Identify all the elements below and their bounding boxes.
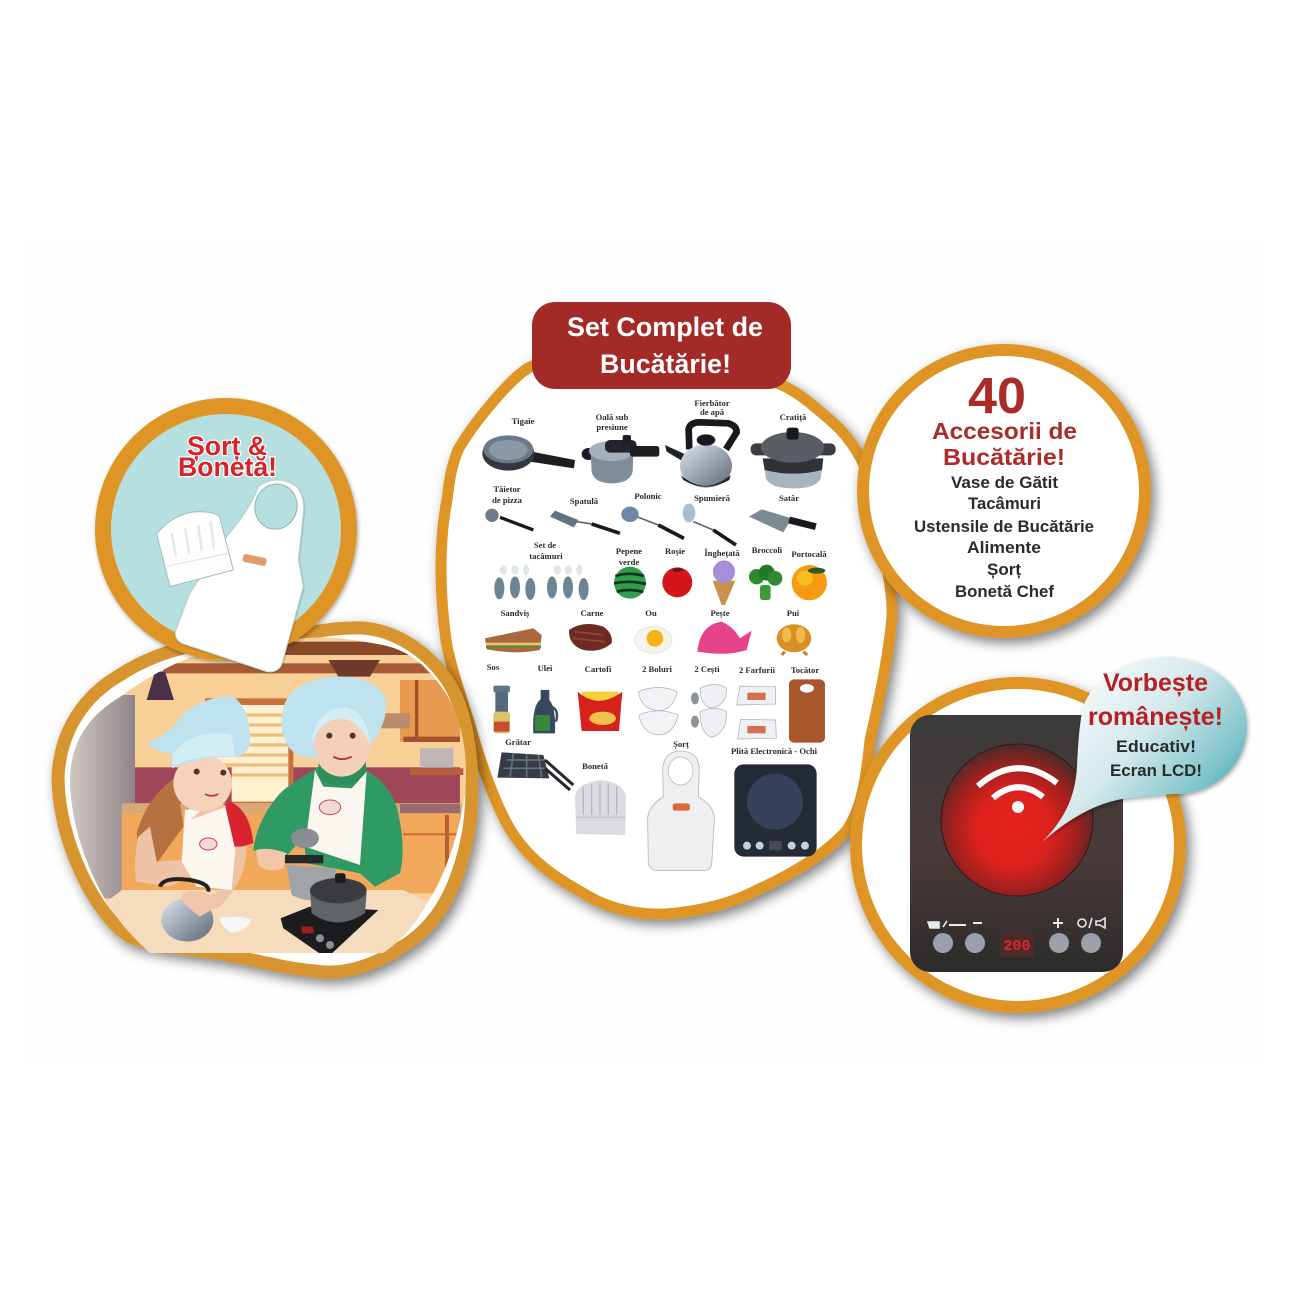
item: Broccoli: Broccoli	[752, 545, 783, 555]
wifi icon	[978, 768, 1057, 813]
LCD display: 200	[1003, 938, 1031, 955]
item: Oală sub presiune: Oală sub	[596, 412, 629, 422]
item: 2 Boluri: 2 Boluri	[642, 664, 673, 674]
item: Satâr	[749, 493, 817, 532]
panel: 40 accessories circle	[863, 350, 1145, 632]
apron illustration	[175, 479, 304, 672]
control buttons	[933, 933, 1101, 953]
item: Grătar	[497, 737, 573, 790]
item: Grătar: Grătar	[505, 737, 531, 747]
item: Bonetă	[575, 761, 626, 835]
item: Polonic	[621, 491, 684, 538]
list of accessories: Vase de Gătit	[951, 473, 1058, 492]
item: Pește: Pește	[710, 608, 730, 618]
heading: Accesorii de Bucătărie: Bucătărie!	[943, 444, 1065, 470]
list of accessories: Bonetă Chef	[955, 582, 1054, 601]
item: Fierbător de apă: de apă	[700, 407, 725, 417]
item: Pui	[777, 608, 811, 655]
item: Polonic: Polonic	[634, 491, 662, 501]
item: Cartofi: Cartofi	[585, 664, 612, 674]
item: Fierbător de apă	[665, 398, 737, 488]
item: Bonetă: Bonetă	[582, 761, 609, 771]
speech bubble: Vorbește	[1103, 669, 1208, 697]
speech bubble: Ecran LCD!	[1110, 761, 1202, 780]
number 40: 40	[968, 367, 1026, 424]
item: Pepene verde	[614, 546, 646, 599]
panel: electronic hob circle	[856, 657, 1247, 1007]
hob device	[910, 715, 1123, 972]
item: 2 Cești	[691, 664, 727, 737]
item: Spumieră	[683, 493, 736, 545]
item: Pepene verde: Pepene	[616, 546, 642, 556]
heading: Accesorii de Bucătărie: Accesorii de	[932, 418, 1077, 444]
heading: Accesorii de Bucătărie	[932, 418, 1077, 470]
list of accessories: Șorț	[987, 560, 1021, 579]
item: Satâr: Satâr	[779, 493, 799, 503]
heading: Șorț & Bonetă: Bonetă!	[178, 452, 277, 482]
item: Șorț	[648, 739, 714, 871]
item: Carne: Carne	[581, 608, 604, 618]
item: Pepene verde: verde	[619, 557, 639, 567]
item: Șorț: Șorț	[673, 739, 689, 749]
item: Carne	[569, 608, 612, 651]
item: Cartofi	[578, 664, 622, 731]
list of accessories: Ustensile de Bucătărie	[914, 517, 1094, 536]
item: Roșie	[662, 546, 692, 597]
item: Sos: Sos	[487, 662, 500, 672]
item: Set de tacâmuri: Set de	[534, 540, 556, 550]
item: Înghețată	[704, 548, 740, 605]
chef hat illustration	[157, 512, 233, 587]
item: Tocător	[789, 665, 825, 743]
item: Set de tacâmuri: tacâmuri	[529, 551, 563, 561]
item: Înghețată: Înghețată	[704, 548, 740, 558]
girl	[135, 697, 253, 913]
item: Portocală: Portocală	[791, 549, 827, 559]
control icons	[928, 918, 1105, 928]
toy kettle and bowl	[160, 879, 252, 942]
item: 2 Cești: 2 Cești	[694, 664, 720, 674]
item: Broccoli	[749, 545, 783, 600]
list of accessories	[914, 473, 1094, 601]
item: Ulei: Ulei	[538, 663, 553, 673]
toy pressure cooker	[285, 828, 337, 900]
item: Tigaie: Tigaie	[512, 416, 535, 426]
heading banner: Set Complet de Bucătărie	[532, 302, 791, 389]
item: Pui: Pui	[787, 608, 800, 618]
item: Ou: Ou	[645, 608, 657, 618]
item: Sandviș	[485, 608, 542, 652]
item: Plită Electronică - Ochi	[731, 746, 818, 857]
item: Tocător: Tocător	[791, 665, 819, 675]
item: Tigaie	[482, 416, 575, 471]
list of accessories: Alimente	[967, 538, 1041, 557]
toy induction plate and pot	[281, 873, 378, 958]
item: 2 Farfurii: 2 Farfurii	[739, 665, 776, 675]
heading banner: Set Complet de Bucătărie: Bucătărie!	[600, 349, 731, 379]
panel: product list blob	[441, 354, 892, 914]
heading: Șorț & Bonetă	[178, 431, 277, 482]
item: Ou	[635, 608, 672, 653]
boy	[253, 677, 403, 887]
item: Sos	[487, 662, 510, 733]
item: Plită Electronică - Ochi: Plită Electronică - Ochi	[731, 746, 818, 756]
speech bubble: românește!	[1088, 703, 1223, 731]
heading: Șorț & Bonetă: Șorț &	[187, 431, 267, 461]
item: Portocală	[791, 549, 827, 600]
list of accessories: Tacâmuri	[968, 494, 1041, 513]
item: Tăietor de pizza	[485, 484, 533, 530]
item: Tăietor de pizza: de pizza	[492, 495, 523, 505]
item: Spatulă: Spatulă	[570, 496, 599, 506]
speech bubble	[1042, 657, 1247, 842]
item: Tăietor de pizza: Tăietor	[493, 484, 521, 494]
background	[25, 240, 1265, 1060]
speech bubble: Educativ!	[1116, 737, 1196, 756]
item: Fierbător de apă: Fierbător	[694, 398, 730, 408]
kitchen illustration with children	[70, 638, 466, 953]
item: Pește	[697, 608, 752, 654]
item: Oală sub presiune	[582, 412, 659, 483]
panel: apron and hat circle	[103, 406, 349, 672]
item: Ulei	[533, 663, 557, 733]
item: 2 Farfurii	[737, 665, 776, 739]
item: Sandviș: Sandviș	[501, 608, 530, 618]
item: Spumieră: Spumieră	[694, 493, 731, 503]
item: Cratiță: Cratiță	[780, 412, 807, 422]
item: Spatulă	[550, 496, 620, 533]
LCD display	[1000, 932, 1034, 957]
item: Cratiță	[751, 412, 836, 488]
item: Roșie: Roșie	[665, 546, 685, 556]
item: Set de tacâmuri	[494, 540, 589, 600]
item: 2 Boluri	[638, 664, 678, 735]
item: Oală sub presiune: presiune	[596, 422, 628, 432]
heading banner: Set Complet de Bucătărie: Set Complet de	[567, 312, 763, 342]
panel: kitchen photo blob	[50, 620, 480, 980]
